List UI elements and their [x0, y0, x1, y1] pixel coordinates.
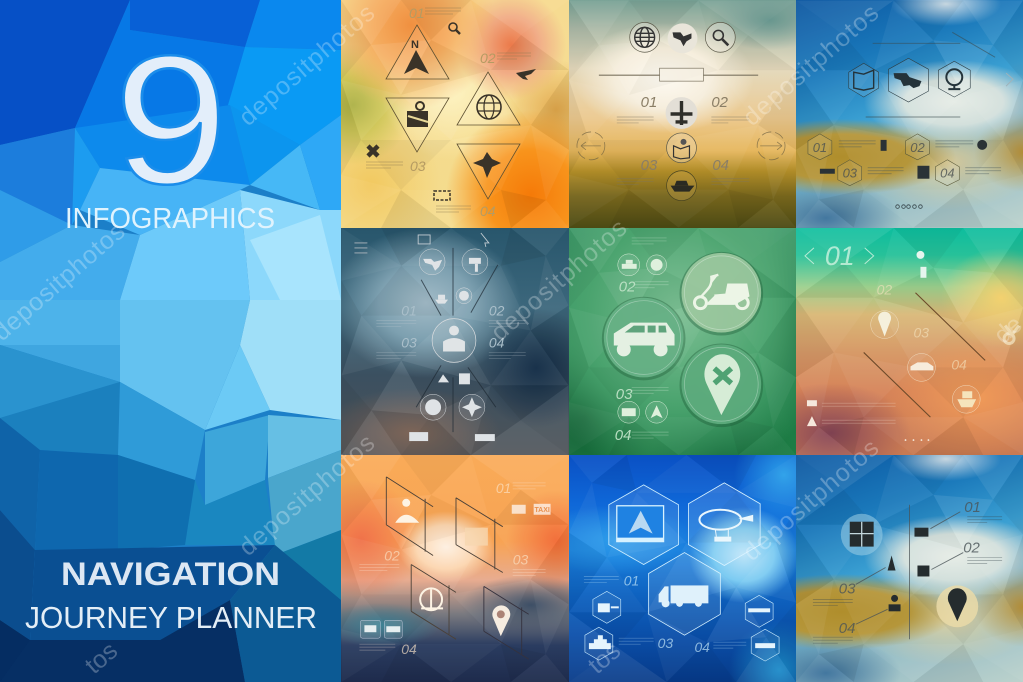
watermarks: tos: [80, 637, 123, 680]
small hexagons: [585, 591, 779, 661]
numbers: 03: [658, 635, 673, 651]
numbers: 04: [615, 427, 631, 444]
background facets: [569, 228, 796, 455]
text lines: [584, 576, 746, 648]
numbers: 04: [951, 356, 967, 372]
heading: navigation: NAVIGATION: [61, 556, 280, 592]
circle: ship: [952, 385, 980, 413]
numbers: [615, 279, 636, 444]
timeline: [856, 505, 963, 639]
icon: map: [854, 70, 874, 90]
hexagon: zeppelin: [688, 483, 760, 566]
box: person: [386, 477, 433, 556]
icon: plane circle: [666, 97, 697, 129]
numbers: [813, 140, 955, 181]
watermarks: tos: [583, 637, 626, 680]
icon: world map circle: [668, 23, 697, 53]
background facets: [341, 0, 569, 228]
text lines: [617, 117, 749, 185]
numbers: 04: [940, 166, 955, 181]
panel: yellow triangles: [341, 0, 569, 228]
circle: car: [602, 297, 685, 380]
numbers: 02: [489, 303, 505, 319]
numbers: 02: [480, 50, 496, 66]
background facets: [796, 455, 1023, 682]
icon: cross: [368, 146, 378, 156]
icon: scissors: [1004, 326, 1019, 343]
triangle 4 with compass: [457, 144, 520, 199]
numbers: 03: [513, 552, 528, 568]
panel: blue hexagons large: [569, 455, 796, 682]
numbers: [624, 572, 710, 655]
numbers: 01: [641, 94, 657, 111]
numbers: 03: [913, 325, 929, 341]
numbers: 04: [489, 334, 505, 350]
icon circles: [419, 249, 488, 420]
text lines: [376, 321, 526, 358]
icons: bus and car: [360, 620, 402, 638]
chevron: [1006, 73, 1013, 86]
text lines: [813, 517, 1002, 643]
numbers: 01: [496, 480, 511, 496]
background facets: cover: [0, 0, 341, 682]
menu icon: [354, 243, 367, 253]
pagination dots: [896, 205, 922, 208]
hexagon: truck: [649, 553, 720, 635]
icon: magnifier: [449, 23, 460, 34]
numbers: 03: [843, 166, 858, 181]
numbers: 03: [641, 157, 658, 174]
icon: plane: [516, 69, 536, 80]
numbers: [641, 94, 729, 174]
numbers: [384, 480, 528, 657]
panel: teal orange slashes: [796, 228, 1023, 455]
triangle 1 with north arrow: [386, 25, 449, 79]
panel: blue olive timeline: [796, 455, 1023, 682]
top icons: map and cursor: [418, 233, 489, 247]
background facets: [569, 0, 796, 228]
background facets: [796, 228, 1023, 455]
hexagon: monitor: [609, 485, 679, 565]
panel: title cover: [0, 0, 341, 682]
big number 9: 9: [114, 17, 228, 222]
small icons: [820, 140, 987, 179]
numbers: 02: [384, 548, 400, 564]
icon: globe: [635, 27, 655, 47]
text lines: [839, 141, 1001, 174]
circle: car: [908, 353, 935, 381]
watermarks: depositphotos: [738, 0, 884, 132]
numbers: 04: [712, 157, 729, 174]
icon: globe: [946, 69, 962, 89]
text lines: [632, 238, 669, 438]
icon: map circle: [667, 133, 696, 163]
arrows: [577, 132, 785, 160]
divider strokes: [866, 32, 995, 117]
circle: pin: [936, 585, 978, 627]
numbers: 03: [839, 580, 856, 597]
numbers: 02: [877, 282, 892, 298]
numbers: 04: [694, 639, 710, 655]
numbers: 04: [839, 620, 855, 637]
circle: map: [841, 514, 883, 556]
watermarks: depositphotos: [234, 429, 380, 562]
pagination dots: [905, 439, 929, 441]
numbers: [409, 5, 496, 219]
background facets: [342, 228, 568, 455]
numbers: 02: [963, 540, 981, 557]
divider lines: [599, 74, 758, 76]
numbers: 03: [410, 158, 426, 174]
small icons bottom: [618, 401, 668, 423]
watermarks: depositphotos: [486, 214, 632, 347]
text lines: [366, 8, 531, 212]
panel: cream globe circles: [569, 0, 796, 228]
circle: pin: [871, 311, 899, 339]
numbers: 02: [619, 279, 636, 296]
label box: [660, 68, 703, 81]
icons: top right: TAXI: [534, 507, 550, 514]
numbers: 04: [401, 641, 417, 657]
numbers: [839, 499, 981, 637]
small hexagons with numbers: [808, 134, 959, 186]
header: 01 with chevrons: 01: [825, 241, 855, 271]
icon: world map: [434, 191, 450, 200]
bottom icons and lines: [807, 400, 896, 426]
central circle with person: [432, 319, 476, 362]
numbers: 04: [480, 203, 496, 219]
box: pin: [484, 586, 529, 659]
icon row backgrounds: [630, 22, 735, 52]
header: 01 with chevrons: [805, 241, 874, 271]
circle: pin with cross: [680, 343, 763, 427]
box: scale: [411, 565, 456, 639]
background facets: [569, 455, 796, 682]
watermarks: depositphotos: [738, 434, 884, 567]
icon: world map: [894, 73, 921, 88]
small icons top: [618, 254, 667, 276]
numbers: 02: [910, 140, 925, 155]
numbers: 02: [711, 94, 729, 111]
numbers: 01: [409, 5, 425, 21]
hexagon icons row: [849, 58, 970, 102]
numbers: 01: [964, 499, 981, 516]
numbers: 01: [401, 303, 417, 319]
small icons: [888, 528, 929, 611]
numbers: [401, 303, 505, 350]
circle: scooter: [680, 252, 763, 336]
icons: [409, 258, 495, 441]
watermarks: depositphotos: [234, 0, 380, 132]
numbers: 03: [401, 334, 417, 350]
background facets: [342, 455, 568, 682]
panel: green circles: [569, 228, 796, 455]
small icons: [589, 603, 775, 649]
triangle 2 with globe: [457, 72, 520, 125]
panel: orange parallelograms: [341, 455, 569, 682]
text lines: [359, 483, 546, 650]
numbers: 03: [616, 386, 633, 403]
icon: magnifier: [713, 30, 728, 45]
numbers: [877, 282, 967, 372]
triangle 1 with north arrow: N: [411, 39, 419, 51]
box: building: [456, 498, 503, 572]
panel: dark slate radial: [341, 228, 569, 455]
icon: ship circle: [667, 171, 696, 201]
background facets: [796, 0, 1023, 228]
heading: infographics: INFOGRAPHICS: [65, 203, 275, 235]
panel: blue hexagons: [796, 0, 1023, 228]
triangle 3 with map pin: [386, 98, 449, 152]
numbers: 01: [624, 572, 639, 588]
icons top: [916, 251, 926, 278]
icons: top right: [512, 504, 551, 515]
spokes: [416, 248, 498, 432]
numbers: 01: [813, 140, 827, 155]
subheading: journey planner: JOURNEY PLANNER: [25, 600, 317, 635]
slash strokes: [864, 293, 985, 417]
